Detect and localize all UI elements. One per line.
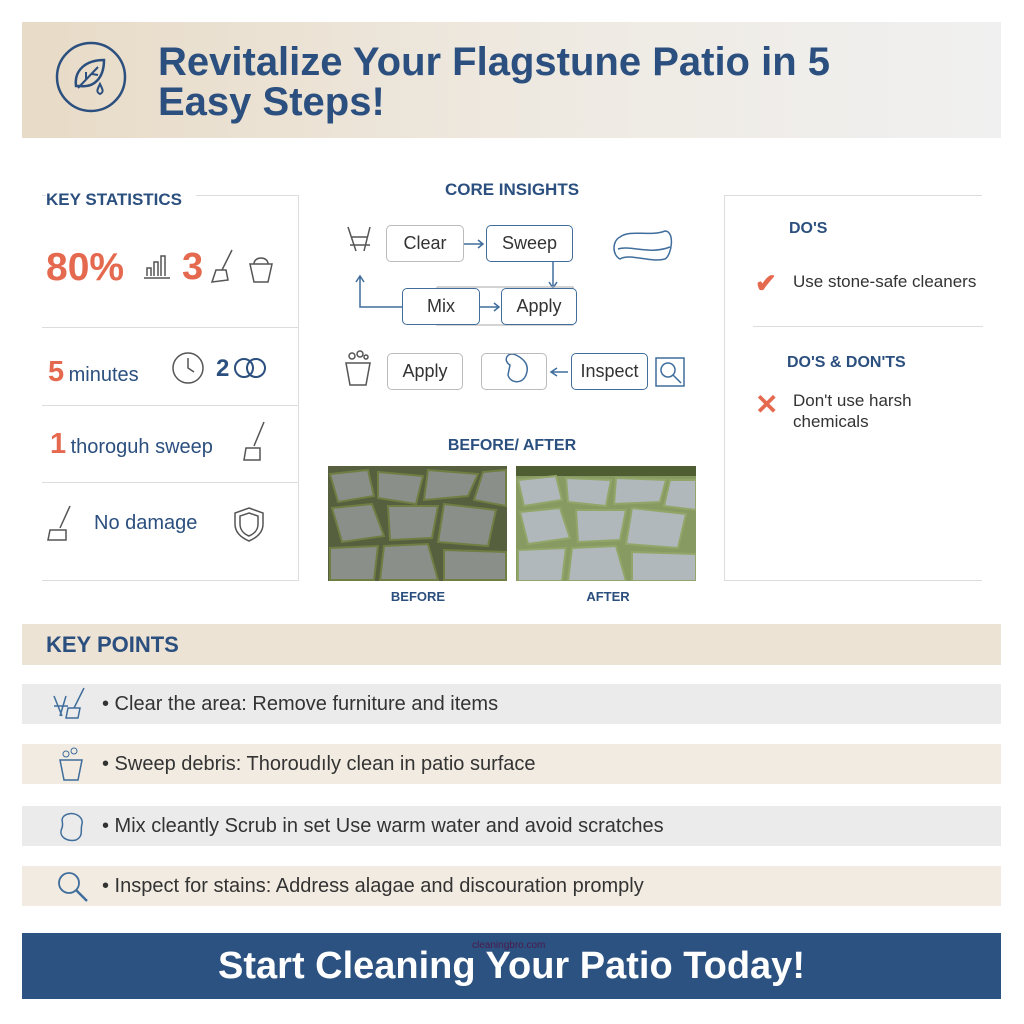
key point 2: • Sweep debris: Thoroudıly clean in patio surface <box>102 752 536 774</box>
icon: leaf and water drop <box>56 42 126 112</box>
item: cross: ✕ <box>755 389 778 420</box>
step: sponge box <box>481 353 547 390</box>
item: cross: Don't use harsh <box>793 391 912 410</box>
step: Apply 2 <box>387 353 463 390</box>
label: after: AFTER <box>586 589 630 604</box>
step: Mix: Mix <box>427 296 455 316</box>
stat: 5 minutes <box>48 352 266 388</box>
stat: thorough sweep <box>50 422 265 461</box>
step: Clear: Clear <box>403 233 446 253</box>
key point 2 <box>22 744 1001 784</box>
step: Mix <box>402 288 480 325</box>
key point 3 <box>22 806 1001 846</box>
key point 1: • Clear the area: Remove furniture and items <box>102 692 498 714</box>
panel: key statistics <box>42 195 299 581</box>
footer call to action: Start Cleaning Your Patio Today! <box>218 945 805 987</box>
step: Sweep <box>486 225 573 262</box>
photo: before <box>328 466 507 581</box>
heading: do's & don'ts: DO'S & DON'TS <box>787 354 906 371</box>
label: before: BEFORE <box>391 589 445 604</box>
stat: 80% and 3: 3 <box>182 246 203 288</box>
step: Apply 2: Apply <box>402 361 448 381</box>
step: Sweep: Sweep <box>502 233 557 253</box>
flow diagram <box>345 225 685 390</box>
stat: 5 minutes: 5 minutes <box>48 356 139 388</box>
heading: core insights: CORE INSIGHTS <box>445 180 579 199</box>
footer call to action: cleaningbro.com <box>472 940 545 951</box>
photo: after <box>516 466 696 581</box>
title: Revitalize Your Flagstune Patio in 5 Easy Steps! <box>158 40 830 124</box>
step: Apply <box>501 288 577 325</box>
key points header <box>22 624 1001 665</box>
stat: thorough sweep: 1 thoroguh sweep <box>50 428 213 460</box>
stat: no damage: No damage <box>94 512 197 534</box>
stat: 80% and 3: 80% <box>46 246 124 289</box>
key point 4: • Inspect for stains: Address alagae and discouration promply <box>102 874 644 896</box>
item: check: ✔ <box>755 268 777 298</box>
panel: do's and don'ts <box>724 195 982 581</box>
item: check <box>755 268 976 298</box>
key point 4 <box>22 866 1001 906</box>
step: Inspect <box>571 353 648 390</box>
header banner <box>22 22 1001 138</box>
heading: before/after: BEFORE/ AFTER <box>448 437 576 454</box>
stat: 5 minutes: 2 <box>216 355 229 382</box>
stat: 80% and 3 <box>46 246 273 289</box>
key points header: KEY POINTS <box>46 632 179 657</box>
key point 3: • Mix cleantly Scrub in set Use warm water and avoid scratches <box>102 814 664 836</box>
key point 1 <box>22 684 1001 724</box>
step: Clear <box>386 225 464 262</box>
stat: no damage <box>47 506 264 542</box>
heading: key statistics: KEY STATISTICS <box>46 190 182 209</box>
step: Inspect: Inspect <box>580 361 639 381</box>
heading: do's: DO'S <box>789 220 827 237</box>
footer call to action <box>22 933 1001 999</box>
step: Apply: Apply <box>516 296 562 316</box>
item: cross: chemicals <box>793 412 869 431</box>
item: check: Use stone-safe cleaners <box>793 272 976 291</box>
item: cross <box>755 389 912 431</box>
